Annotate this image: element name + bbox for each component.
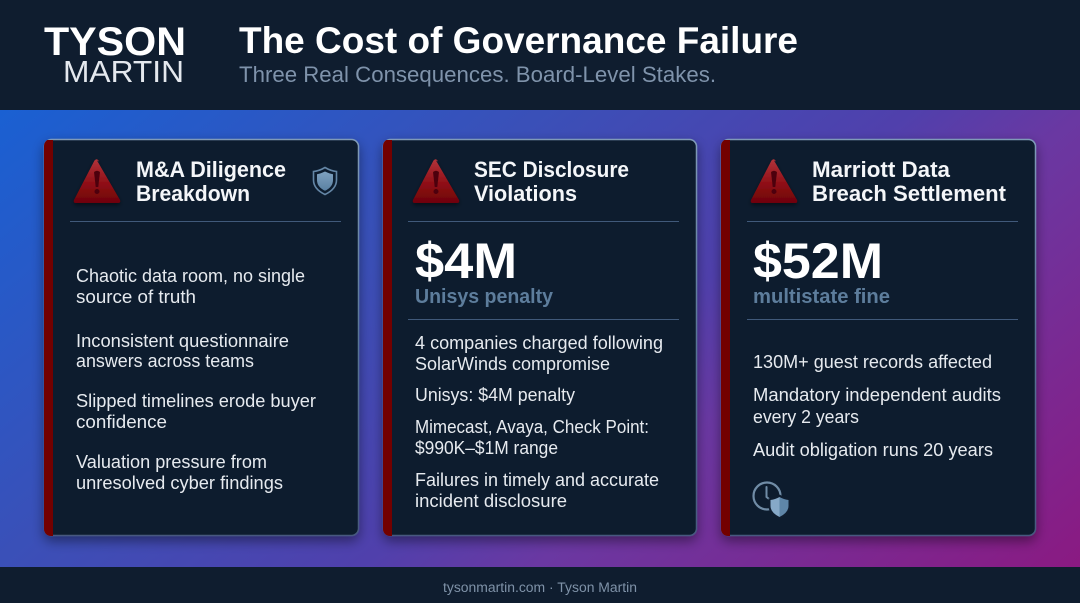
text block: consequences [76,266,316,493]
icon: warning triangle [74,159,120,203]
heading: Marriott Data [812,157,951,182]
text block: consequences: source of truth [76,287,196,307]
big number: $52M [753,233,883,289]
number caption: Unisys penalty [415,286,554,308]
text block: details: every 2 years [753,407,859,427]
logo [44,20,186,89]
text block: details: $990K–$1M range [415,438,558,458]
text block: details: Failures in timely and accurate [415,470,659,490]
footer text: tysonmartin.com · Tyson Martin [443,580,637,595]
text block: details: 130M+ guest records affected [753,352,992,372]
logo: TYSON [44,20,186,64]
text block: details: Mimecast, Avaya, Check Point: [415,417,649,437]
text block: details [753,352,1001,460]
heading: Breakdown [136,181,250,206]
icon: clock with shield [754,482,790,519]
heading [812,157,1007,206]
heading: Violations [474,181,577,206]
logo: MARTIN [63,54,184,89]
heading [136,157,286,206]
number caption: multistate fine [753,286,890,308]
icon: warning triangle [751,159,797,203]
gradient background band [0,110,1080,567]
heading: Breach Settlement [812,181,1007,206]
icon: shield [314,168,336,194]
text block: details: Mandatory independent audits [753,385,1001,405]
text block: consequences: Slipped timelines erode buyer [76,391,316,411]
title: The Cost of Governance Failure [239,20,798,61]
text block: details: incident disclosure [415,491,567,511]
panel: M&A Diligence Breakdown [44,140,358,536]
text block: details: 4 companies charged following [415,333,663,353]
text block: consequences: answers across teams [76,351,254,371]
panel: Marriott Data Breach Settlement [721,140,1036,536]
header bar [0,0,1080,110]
text block: consequences: Chaotic data room, no single [76,266,305,286]
text block: details [415,333,663,511]
subtitle: Three Real Consequences. Board-Level Stakes. [239,62,716,87]
heading: M&A Diligence [136,157,286,182]
text block: details: Audit obligation runs 20 years [753,440,993,460]
text block: consequences: confidence [76,412,167,432]
panel: SEC Disclosure Violations [383,140,696,536]
text block: consequences: Valuation pressure from [76,452,267,472]
text block: consequences: Inconsistent questionnaire [76,331,289,351]
heading [474,157,629,206]
text block: details: SolarWinds compromise [415,354,610,374]
text block: details: Unisys: $4M penalty [415,385,575,405]
heading: SEC Disclosure [474,157,629,182]
text block: consequences: unresolved cyber findings [76,473,283,493]
big number: $4M [415,233,517,289]
footer [0,567,1080,603]
icon: warning triangle [413,159,459,203]
